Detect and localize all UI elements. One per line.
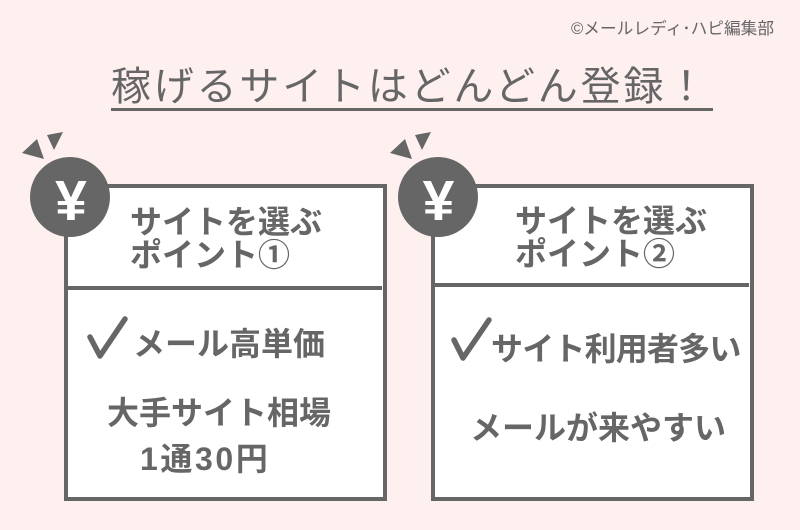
- divider heading: [68, 286, 382, 290]
- check icon 2: [451, 317, 492, 361]
- heading: point 2: サイトを選ぶ: [515, 203, 707, 239]
- panel: point 1: [64, 184, 387, 501]
- text: 30 yen: 1通30円: [140, 441, 270, 477]
- heading: point 1: サイトを選ぶ: [130, 204, 322, 240]
- heading: point 1: ポイント①: [130, 237, 290, 273]
- credit: ©メールレディ･ハピ編集部: [571, 19, 774, 38]
- heading: point 1: [130, 204, 322, 273]
- text: mail price: メール高単価: [133, 326, 325, 362]
- text: major site rate: 大手サイト相場: [107, 395, 331, 431]
- badge: yen 1: [22, 132, 110, 237]
- text: mail comes easily: メールが来やすい: [470, 410, 726, 446]
- panel: point 2: [431, 184, 754, 501]
- divider heading 2: [435, 283, 749, 287]
- heading: point 2: ポイント②: [515, 236, 675, 272]
- badge: yen 2: ¥: [423, 169, 455, 233]
- check icon 1: [87, 316, 128, 359]
- badge: yen 1: ¥: [55, 169, 87, 233]
- badge: yen 2: [390, 132, 478, 237]
- text: many users: サイト利用者多い: [491, 331, 741, 367]
- title: 稼げるサイトはどんどん登録！: [111, 65, 709, 109]
- heading: point 2: [515, 203, 707, 272]
